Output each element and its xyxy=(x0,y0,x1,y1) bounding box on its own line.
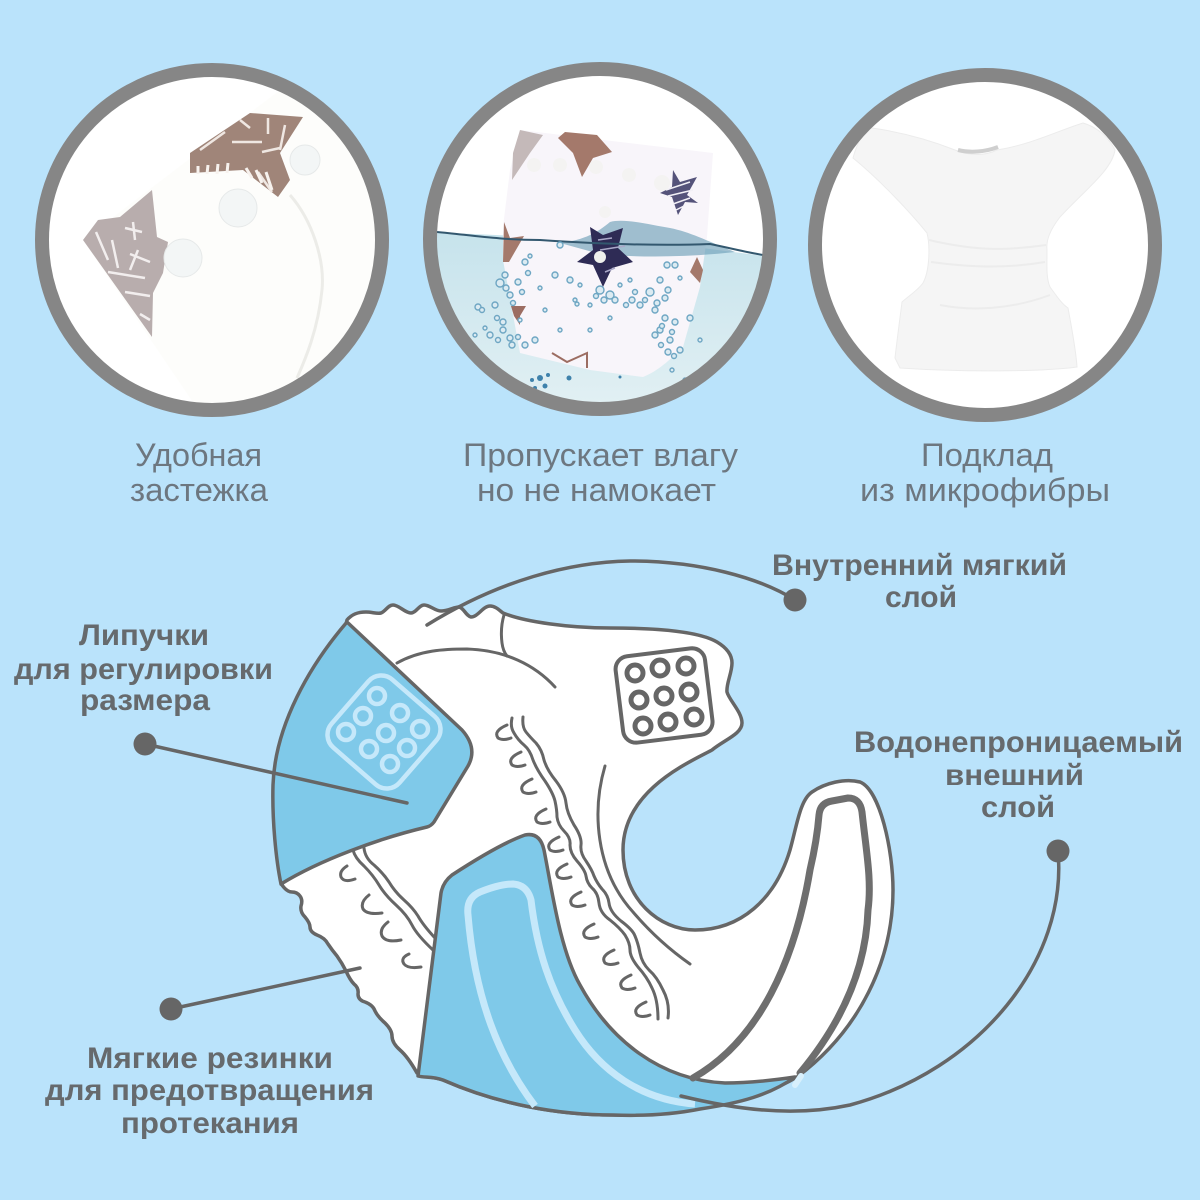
label: inner soft layer xyxy=(772,549,1067,614)
snap buttons xyxy=(164,145,320,277)
caption: microfiber xyxy=(860,437,1110,508)
dark bubbles xyxy=(530,373,622,390)
brown star xyxy=(190,113,303,197)
label: soft elastics: протекания xyxy=(121,1107,299,1140)
grey star xyxy=(83,190,168,337)
leader line: snaps xyxy=(134,732,407,803)
caption: closure xyxy=(130,437,268,508)
leader line: elastic xyxy=(160,968,360,1020)
panel: water-resistant photo xyxy=(430,69,780,420)
white snap plate xyxy=(614,647,714,744)
caption: moisture xyxy=(463,437,738,508)
caption: microfiber: из микрофибры xyxy=(860,472,1110,508)
flap seam xyxy=(290,195,322,378)
light inner stripe xyxy=(468,884,695,1106)
label: waterproof outer layer: Водонепроницаемый xyxy=(854,726,1183,759)
caption: moisture: Пропускает влагу xyxy=(463,437,738,473)
panel: snap closure photo xyxy=(42,60,400,420)
thick inner cuff xyxy=(693,798,869,1078)
leader line: outer layer xyxy=(681,840,1070,1111)
left blue tab xyxy=(273,622,472,884)
panel: microfiber lining photo xyxy=(815,75,1155,415)
caption: moisture: но не намокает xyxy=(477,472,716,508)
waist seams xyxy=(397,615,690,964)
blue snap plate xyxy=(321,669,447,795)
cuff tip highlight xyxy=(795,1076,801,1085)
bubbles xyxy=(473,242,702,382)
caption: closure: Удобная xyxy=(135,437,262,473)
caption: microfiber: Подклад xyxy=(921,437,1053,473)
water body xyxy=(437,233,762,402)
label: adjustment snaps: Липучки xyxy=(79,619,209,652)
diaper lining xyxy=(853,123,1115,371)
label: adjustment snaps: для регулировки xyxy=(14,653,273,686)
bottom blue panel xyxy=(418,835,795,1115)
snaps xyxy=(589,162,666,191)
label: inner soft layer: слой xyxy=(885,581,957,614)
label: inner soft layer: Внутренний мягкий xyxy=(772,549,1067,582)
label: soft elastics: для предотвращения xyxy=(45,1074,374,1107)
elastic hook marks xyxy=(341,725,650,1016)
waterline xyxy=(437,232,763,255)
label: waterproof outer layer: внешний xyxy=(945,759,1084,792)
leader line: inner layer xyxy=(427,561,806,625)
label: waterproof outer layer xyxy=(854,726,1183,824)
elastic wavy stitching xyxy=(353,717,668,1019)
diaper flap fabric xyxy=(83,60,400,420)
waistband stitching xyxy=(958,147,998,152)
diaper stars xyxy=(503,130,703,368)
diagram: diaper illustration xyxy=(273,605,893,1115)
diaper xyxy=(503,130,713,377)
wave crest xyxy=(560,221,735,256)
diaper body xyxy=(282,605,893,1115)
label: soft elastics xyxy=(45,1042,374,1140)
label: adjustment snaps xyxy=(14,619,273,717)
caption: closure: застежка xyxy=(130,472,268,508)
label: adjustment snaps: размера xyxy=(80,684,210,717)
label: soft elastics: Мягкие резинки xyxy=(87,1042,333,1075)
elastic gathers xyxy=(929,240,1050,308)
label: waterproof outer layer: слой xyxy=(981,791,1055,824)
